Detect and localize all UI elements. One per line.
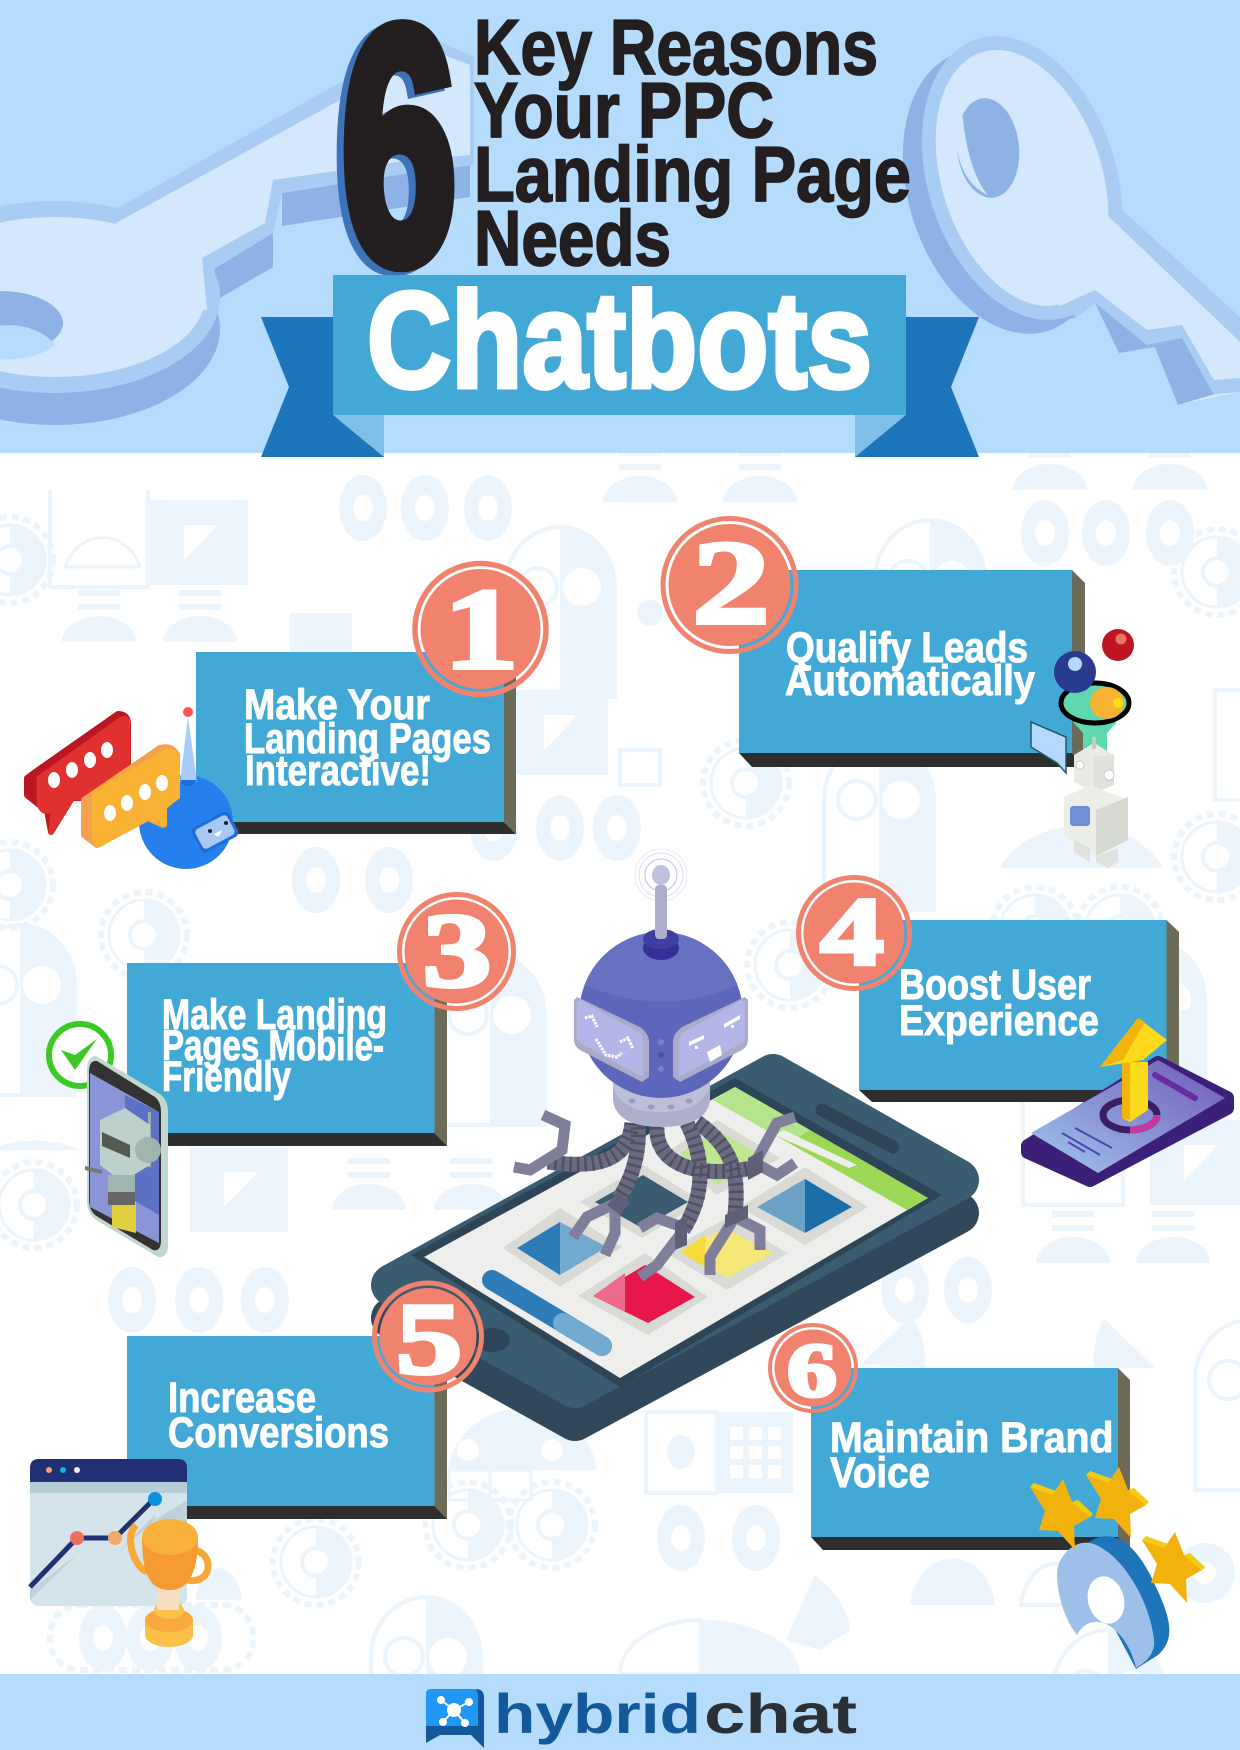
text [899,961,1099,1045]
phone speaker [822,1110,893,1147]
app tiles [665,1120,780,1195]
right eye panel [673,997,748,1082]
number badge 2 [663,517,796,652]
arms [548,1122,752,1230]
blue pill [492,1280,602,1346]
home button [474,1328,510,1352]
text: Make Your [244,681,430,729]
left key [0,35,474,425]
panel 1: interactive [27,564,546,869]
icon: chat bubbles and robot [27,707,240,869]
centre dots [658,1039,664,1072]
text: Experience [899,997,1099,1045]
number badge 4: 4 [820,877,884,986]
pale control panel shape [646,1382,793,1493]
head [579,932,743,1098]
title [334,0,911,336]
number badge 1: 1 [443,565,519,694]
ribbon: Chatbots: Chatbots [367,264,872,416]
number badge 2: 2 [692,517,770,650]
icon: bot head with stars [1030,1467,1205,1669]
text: Maintain Brand [830,1414,1114,1462]
text: Qualify Leads [786,624,1028,672]
antenna signal rings [635,849,687,901]
box [739,570,1085,767]
number badge 4 [798,877,910,988]
central robot [514,849,795,1277]
logo wordmark [494,1682,857,1745]
panel 3: mobile friendly [49,891,514,1257]
number badge 5 [374,1282,482,1395]
ribbon: Chatbots [261,264,979,457]
antenna [643,936,679,960]
text [785,624,1035,705]
number badge 6: 6 [787,1329,837,1413]
phone screen [424,1087,928,1378]
phone body [392,1108,958,1420]
icon: check badge and phone [49,1024,168,1257]
number badge 3 [400,891,514,1009]
text: Boost User [899,961,1091,1009]
panel 6: brand voice [770,1325,1205,1669]
icon: lead funnel robot [1031,629,1134,868]
heading text: Your PPC [474,66,774,154]
logo wordmark: hybrid [494,1682,701,1745]
box [859,920,1179,1102]
heading text [474,3,911,282]
panel 4: user experience [798,877,1227,1180]
text [830,1414,1114,1497]
heading text: Landing Page [474,130,911,218]
text: Voice [830,1449,930,1497]
text: Automatically [785,657,1035,705]
grippers [514,1115,795,1277]
text: Friendly [162,1053,291,1101]
icon: growth chart and trophy [30,1459,208,1647]
number badge 6 [770,1325,856,1413]
icon: phone with rising arrow [1028,1018,1227,1180]
heading text: Needs [474,194,671,282]
central phone [392,1075,958,1420]
footer band [0,1674,1240,1750]
text [162,991,387,1101]
number badge 5: 5 [396,1282,462,1395]
number badge 1 [415,564,546,694]
right key [868,10,1240,405]
text: Increase [168,1374,316,1422]
neck [613,1075,710,1127]
text: Make Landing [162,991,387,1039]
background robot pattern [0,438,1240,1750]
text: Interactive! [245,747,431,795]
box [196,652,516,834]
heading text: Key Reasons [474,3,878,91]
logo wordmark: chat [704,1682,857,1745]
panel 2: qualify leads [663,517,1134,868]
text: Landing Pages [244,715,491,763]
box [127,1336,447,1519]
green header [713,1087,928,1210]
text [168,1374,389,1457]
box [127,963,447,1146]
header band [0,0,1240,453]
big number 6 [334,0,457,336]
logo icon [426,1689,484,1748]
text: Pages Mobile- [162,1022,384,1070]
panel 5: conversions [30,1282,482,1647]
left eye panel [574,997,649,1082]
number badge 3: 3 [423,891,491,1009]
text [244,681,491,795]
text: Conversions [168,1409,389,1457]
box [811,1368,1130,1550]
